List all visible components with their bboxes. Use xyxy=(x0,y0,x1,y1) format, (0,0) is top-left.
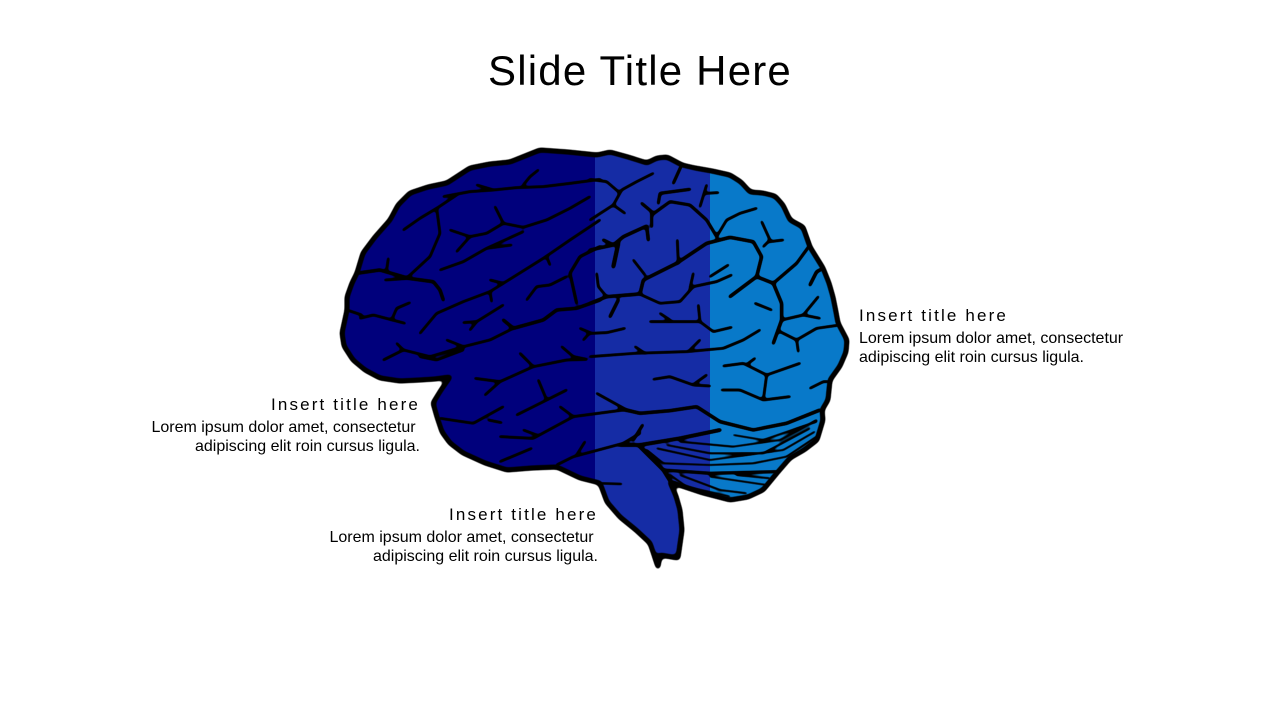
callout: right xyxy=(859,306,1123,366)
brainstem edge xyxy=(640,447,672,483)
callout: right: Insert title here xyxy=(859,306,1008,325)
callout: left: Insert title here xyxy=(271,395,420,414)
callout: bottom xyxy=(329,505,598,565)
region: right light blue band xyxy=(710,173,844,498)
callout: bottom: Lorem ipsum dolor amet, consectetur xyxy=(329,529,594,546)
callout: bottom: Insert title here xyxy=(449,505,598,524)
sulci: upper left lobes xyxy=(347,170,600,360)
callout: left: adipiscing elit roin cursus ligula. xyxy=(195,438,420,455)
brain illustration xyxy=(339,147,850,569)
sulci: upper right lobes xyxy=(590,165,840,357)
callout: left xyxy=(151,395,420,455)
sulci: lower right lobes xyxy=(653,358,828,400)
callout: right: adipiscing elit roin cursus ligula. xyxy=(859,349,1084,366)
boundary between cerebrum and cerebellum xyxy=(620,407,820,430)
region: middle blue band xyxy=(595,140,710,580)
sulci: lower temporal lobe xyxy=(420,350,640,484)
callout: bottom: adipiscing elit roin cursus ligula. xyxy=(373,548,598,565)
callout: right: Lorem ipsum dolor amet, consectetur xyxy=(859,330,1123,347)
brain outline xyxy=(342,150,847,567)
brain line art xyxy=(347,165,840,497)
cerebellum xyxy=(620,407,820,497)
title: Slide Title Here xyxy=(488,47,792,94)
region: left dark navy band xyxy=(344,152,595,480)
callout: left: Lorem ipsum dolor amet, consectetur xyxy=(151,419,416,436)
folia lines xyxy=(647,437,817,465)
